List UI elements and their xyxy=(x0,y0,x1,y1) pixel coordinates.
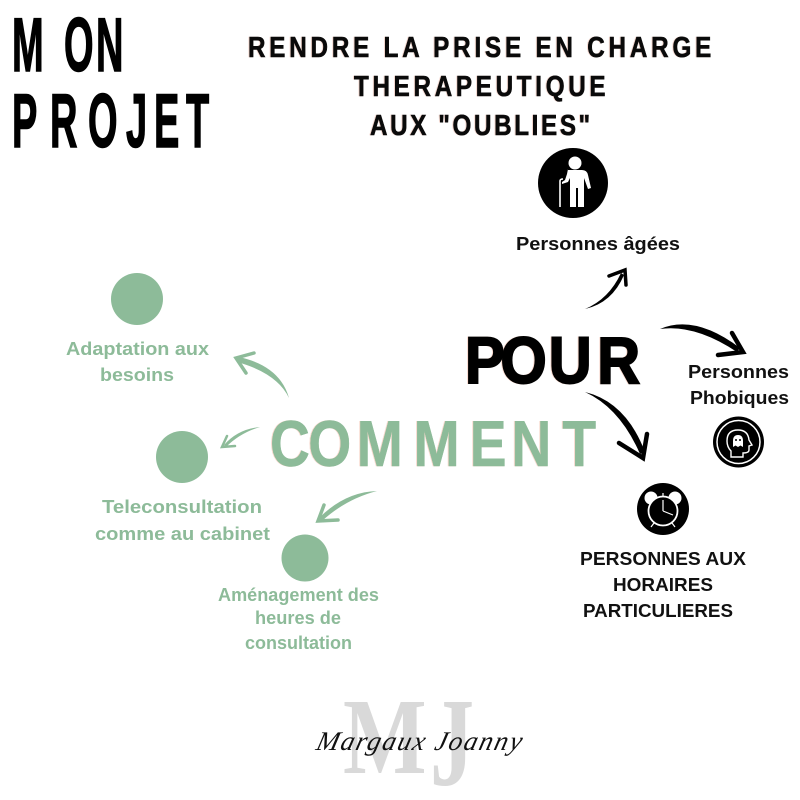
word: comment: COMMENT xyxy=(270,407,596,480)
label: teleconsultation comme au cabinet xyxy=(95,497,270,544)
title: THERAPEUTIQUE xyxy=(354,70,606,102)
icon: phobia head xyxy=(713,416,764,468)
title xyxy=(248,31,711,141)
logo: monogram and signature xyxy=(313,673,527,800)
label: amenagement des heures de consultation: Aménagement des xyxy=(218,585,379,605)
arrow: comment to adaptation xyxy=(236,353,289,398)
logo: monogram and signature: Margaux Joanny xyxy=(313,726,527,756)
bullet: adaptation xyxy=(111,273,163,325)
arrow: pour to personnes agees xyxy=(585,270,626,309)
label: adaptation aux besoins xyxy=(66,339,209,385)
heading: mon projet: PROJET xyxy=(12,79,209,163)
arrow: pour to personnes phobiques xyxy=(660,324,743,355)
label: teleconsultation comme au cabinet: comme au cabinet xyxy=(95,524,270,544)
label: personnes aux horaires particulieres xyxy=(580,549,746,621)
label: amenagement des heures de consultation: heures de xyxy=(255,608,341,628)
label: personnes phobiques: Personnes xyxy=(688,362,789,382)
arrow: comment to teleconsultation xyxy=(222,427,260,447)
bullet: teleconsultation xyxy=(156,431,208,483)
logo: monogram and signature: M xyxy=(343,678,427,797)
word: pour: POUR xyxy=(465,324,640,398)
label: personnes phobiques xyxy=(688,362,789,408)
heading: mon projet: MON xyxy=(12,3,123,87)
heading: mon projet xyxy=(12,3,209,163)
arrow: comment to amenagement xyxy=(318,491,377,521)
label: personnes aux horaires particulieres: PARTICULIERES xyxy=(583,601,733,621)
label: teleconsultation comme au cabinet: Teleconsultation xyxy=(102,497,262,517)
label: personnes agees: Personnes âgées xyxy=(516,234,680,254)
bullet: amenagement xyxy=(282,534,328,582)
icon: alarm clock xyxy=(637,483,689,535)
title: AUX "OUBLIES" xyxy=(370,109,590,141)
label: personnes phobiques: Phobiques xyxy=(690,388,789,408)
label: adaptation aux besoins: besoins xyxy=(100,365,174,385)
label: personnes aux horaires particulieres: PERSONNES AUX xyxy=(580,549,746,569)
label: personnes aux horaires particulieres: HORAIRES xyxy=(613,575,713,595)
label: amenagement des heures de consultation: consultation xyxy=(245,633,352,653)
label: adaptation aux besoins: Adaptation aux xyxy=(66,339,209,359)
title: RENDRE LA PRISE EN CHARGE xyxy=(248,31,711,63)
label: amenagement des heures de consultation xyxy=(218,585,379,653)
arrow: pour to personnes aux horaires xyxy=(585,392,647,458)
icon: elderly person xyxy=(538,148,608,218)
